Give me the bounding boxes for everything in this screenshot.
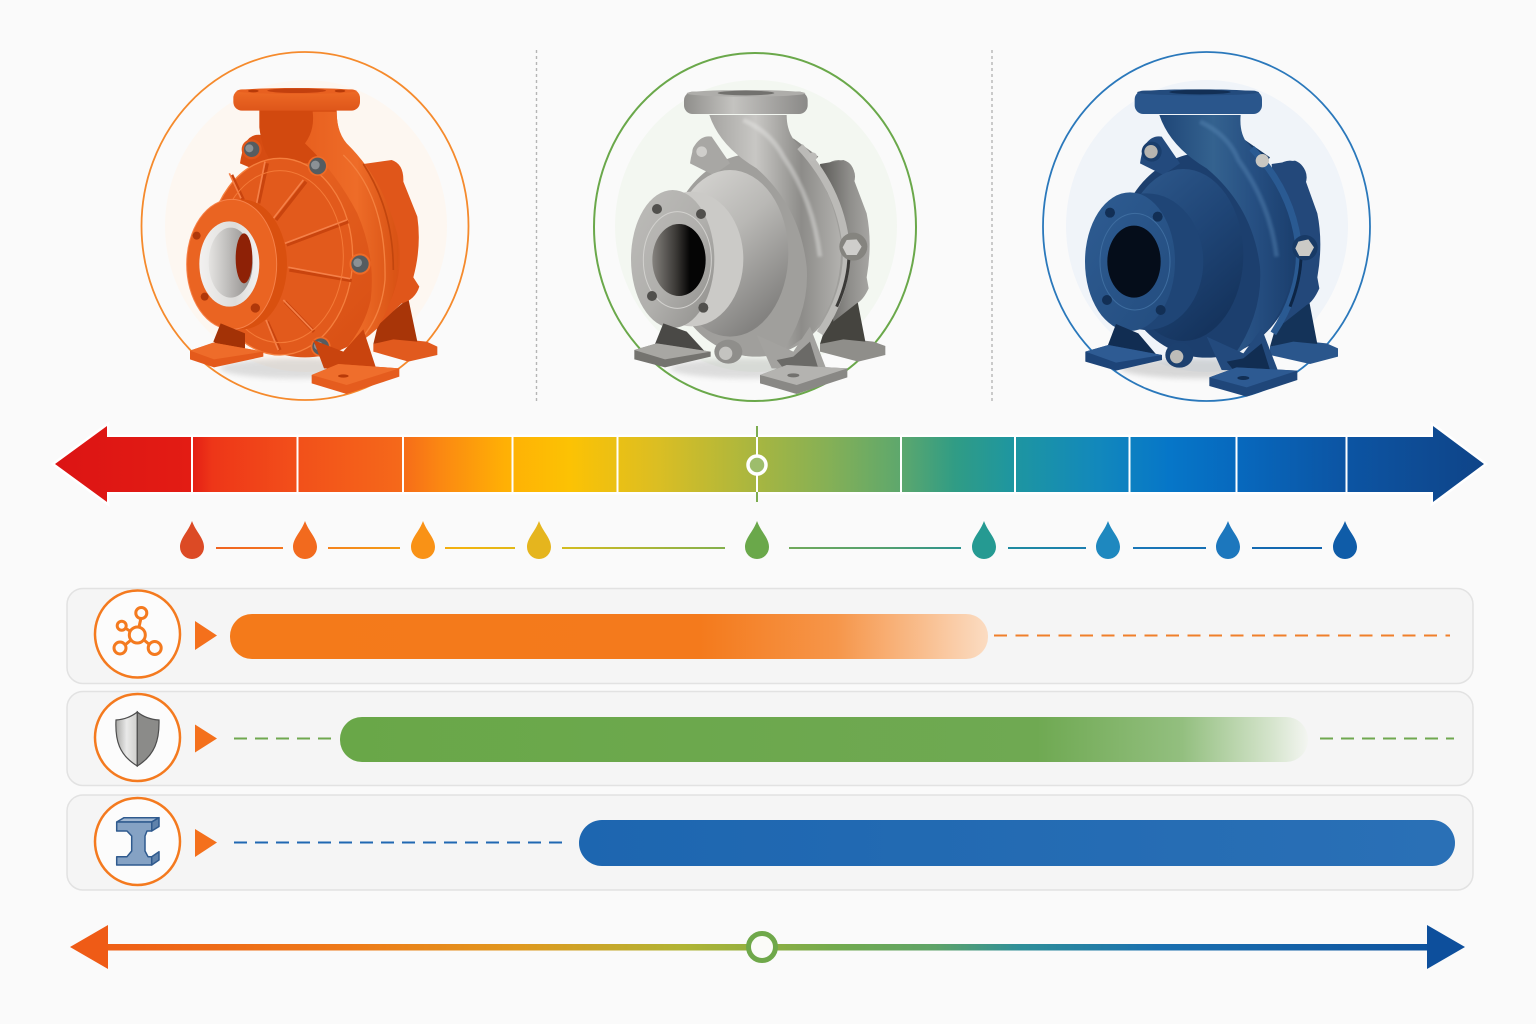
drop 3 bbox=[411, 521, 435, 559]
divider: left bbox=[536, 50, 538, 402]
drop 1 bbox=[180, 521, 204, 559]
pump illustration: blue bbox=[1085, 89, 1338, 397]
pump illustration: steel bbox=[631, 90, 885, 394]
divider: right bbox=[991, 50, 993, 402]
backdrop circle bbox=[142, 52, 468, 400]
drop 4 bbox=[527, 521, 551, 559]
drop 2 bbox=[293, 521, 317, 559]
bar: green range bbox=[340, 717, 1308, 762]
drop 8 bbox=[1216, 521, 1240, 559]
center marker bbox=[748, 934, 776, 960]
pump illustration: orange bbox=[187, 88, 437, 394]
icon: shield bbox=[95, 694, 180, 781]
panel: blue cast iron pump bbox=[1043, 52, 1370, 401]
bottom arrow scale bbox=[70, 925, 1465, 969]
arrow marker bbox=[195, 829, 217, 857]
bar: blue range bbox=[579, 820, 1455, 866]
icon: steel beam bbox=[95, 798, 180, 885]
drop 6 bbox=[972, 521, 996, 559]
panel: orange lined pump bbox=[142, 52, 468, 400]
arrow marker bbox=[195, 724, 217, 752]
row: mechanical strength bbox=[67, 795, 1473, 890]
dashed extension bbox=[994, 634, 1450, 636]
drop 7 bbox=[1096, 521, 1120, 559]
bar: orange range bbox=[230, 614, 988, 659]
drop 9 bbox=[1333, 521, 1357, 559]
drop scale bbox=[180, 521, 1357, 559]
chemical resistance spectrum arrow bbox=[55, 426, 1484, 502]
backdrop circle bbox=[1043, 52, 1370, 401]
drop 5 bbox=[745, 521, 769, 559]
left arrowhead bbox=[70, 925, 108, 969]
panel: stainless steel pump bbox=[594, 53, 916, 401]
right arrowhead bbox=[1427, 925, 1465, 969]
dashed extension bbox=[234, 842, 568, 844]
neutral marker bbox=[748, 426, 766, 502]
icon: molecule bbox=[95, 590, 180, 678]
dashed extension right bbox=[1320, 738, 1454, 740]
arrow marker bbox=[195, 621, 217, 650]
backdrop circle bbox=[594, 53, 916, 401]
dashed extension left bbox=[234, 738, 332, 740]
row: corrosion protection bbox=[67, 692, 1473, 786]
row: chemical resistance bbox=[67, 588, 1473, 684]
